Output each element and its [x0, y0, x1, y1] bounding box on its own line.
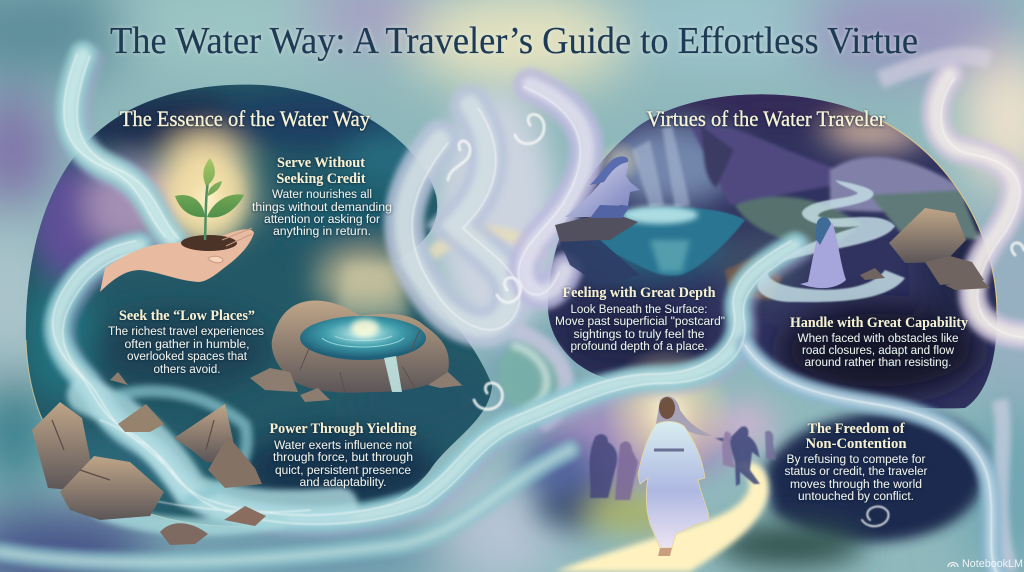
stem: [205, 165, 210, 240]
light: [351, 319, 379, 337]
heading: virtues: Virtues of the Water Traveler: [646, 106, 886, 131]
glowing path: [555, 462, 769, 572]
block: feeling with great depth: Look Beneath the Surface:: [570, 302, 708, 316]
block: handle with great capability: around rather than resisting.: [804, 355, 952, 369]
block: serve without seeking credit: Seeking Credit: [276, 171, 366, 187]
block: power through yielding: and adaptability.: [300, 475, 386, 489]
block: handle with great capability: [790, 315, 968, 369]
block: serve without seeking credit: attention or asking for: [264, 212, 380, 226]
panel: right virtues blob: [548, 94, 997, 408]
river: [757, 180, 905, 302]
block: seek the low places: [108, 308, 264, 376]
block: serve without seeking credit: things without demanding: [252, 200, 392, 214]
block: feeling with great depth: profound depth of a place.: [570, 339, 708, 353]
block: freedom of non-contention: moves through the world: [790, 477, 922, 491]
block: serve without seeking credit: anything in return.: [273, 224, 371, 238]
block: power through yielding: through force, but through: [273, 450, 413, 464]
block: freedom of non-contention: Non-Contention: [806, 436, 907, 452]
halo: [602, 346, 734, 478]
block: seek the low places: The richest travel experiences: [108, 324, 264, 338]
swirls: [448, 114, 1024, 526]
robe fold: [590, 205, 630, 218]
boulder: [889, 208, 966, 263]
cave streaks: [632, 125, 690, 208]
block: handle with great capability: Handle with Great Capability: [790, 315, 968, 331]
block: power through yielding: quict, persistent presence: [275, 463, 411, 477]
hair wind: [656, 396, 712, 436]
panel outline: left: [26, 340, 250, 526]
block: power through yielding: [270, 421, 417, 489]
block: serve without seeking credit: Water nourishes all: [272, 187, 372, 201]
banks: [725, 255, 782, 300]
block: power through yielding: Power Through Yielding: [270, 421, 417, 437]
center spiral wash: [430, 56, 1010, 572]
block: serve without seeking credit: Serve Without: [277, 155, 365, 171]
illustration: walking luminous traveler: [638, 396, 712, 556]
leaves: [175, 158, 244, 218]
block: freedom of non-contention: untouched by conflict.: [798, 489, 914, 503]
illustration: cupped hand with sprout: [100, 152, 254, 292]
belt: [654, 448, 684, 452]
block: seek the low places: Seek the “Low Places”: [119, 308, 255, 324]
block: freedom of non-contention: The Freedom of: [808, 421, 905, 437]
block: seek the low places: others avoid.: [154, 362, 220, 376]
block: feeling with great depth: sightings to truly feel the: [574, 327, 705, 341]
panel: freedom dark blob: [765, 410, 986, 542]
illustration: kneeling traveler at pool: [555, 140, 745, 285]
block: seek the low places: overlooked spaces that: [127, 349, 248, 363]
text: right panel: [555, 106, 968, 503]
block: power through yielding: Water exerts influence not: [274, 438, 413, 452]
rings: [322, 336, 404, 347]
hills: [690, 125, 833, 206]
block: freedom of non-contention: [784, 421, 928, 503]
text: left panel: [108, 106, 417, 489]
rocks: [250, 368, 465, 402]
block: handle with great capability: road closures, adapt and flow: [802, 343, 954, 357]
hand: [100, 229, 254, 292]
illustration: stone well: [250, 301, 465, 402]
panel: left essence blob: [26, 84, 492, 526]
figure: [565, 157, 640, 217]
block: handle with great capability: When faced with obstacles like: [798, 331, 959, 345]
scene: lower traveler landscape: [520, 346, 865, 572]
robe: [638, 421, 709, 548]
halo: [598, 140, 642, 184]
silhouettes: [589, 426, 776, 500]
hair: [590, 156, 628, 185]
panel outline: right: [880, 120, 997, 315]
soil: [181, 235, 237, 251]
rock ledge: [555, 212, 638, 242]
spill: [384, 356, 402, 392]
title: The Water Way: A Traveler’s Guide to Effortless Virtue: [110, 20, 918, 62]
block: freedom of non-contention: status or credit, the traveler: [784, 464, 928, 478]
rock water: [85, 395, 340, 508]
illustration: river rocks: [32, 372, 266, 545]
heading: essence: The Essence of the Water Way: [120, 106, 370, 131]
pool: [590, 207, 745, 276]
face: [659, 397, 675, 419]
illustration: river and wading traveler: [757, 180, 990, 302]
cave light: [335, 262, 410, 320]
block: serve without seeking credit: [252, 155, 392, 238]
fingers: [208, 228, 252, 263]
block: freedom of non-contention: By refusing to compete for: [786, 452, 926, 466]
foot: [658, 548, 672, 556]
block: feeling with great depth: Feeling with Great Depth: [562, 285, 716, 301]
block: feeling with great depth: Move past superficial "postcard": [555, 314, 725, 328]
notebooklm logo: NotebookLM: [962, 558, 1023, 570]
block: seek the low places: often gather in humble,: [124, 337, 250, 351]
figure: [800, 220, 846, 288]
block: feeling with great depth: [555, 285, 725, 353]
pool base rocks: [560, 240, 640, 285]
